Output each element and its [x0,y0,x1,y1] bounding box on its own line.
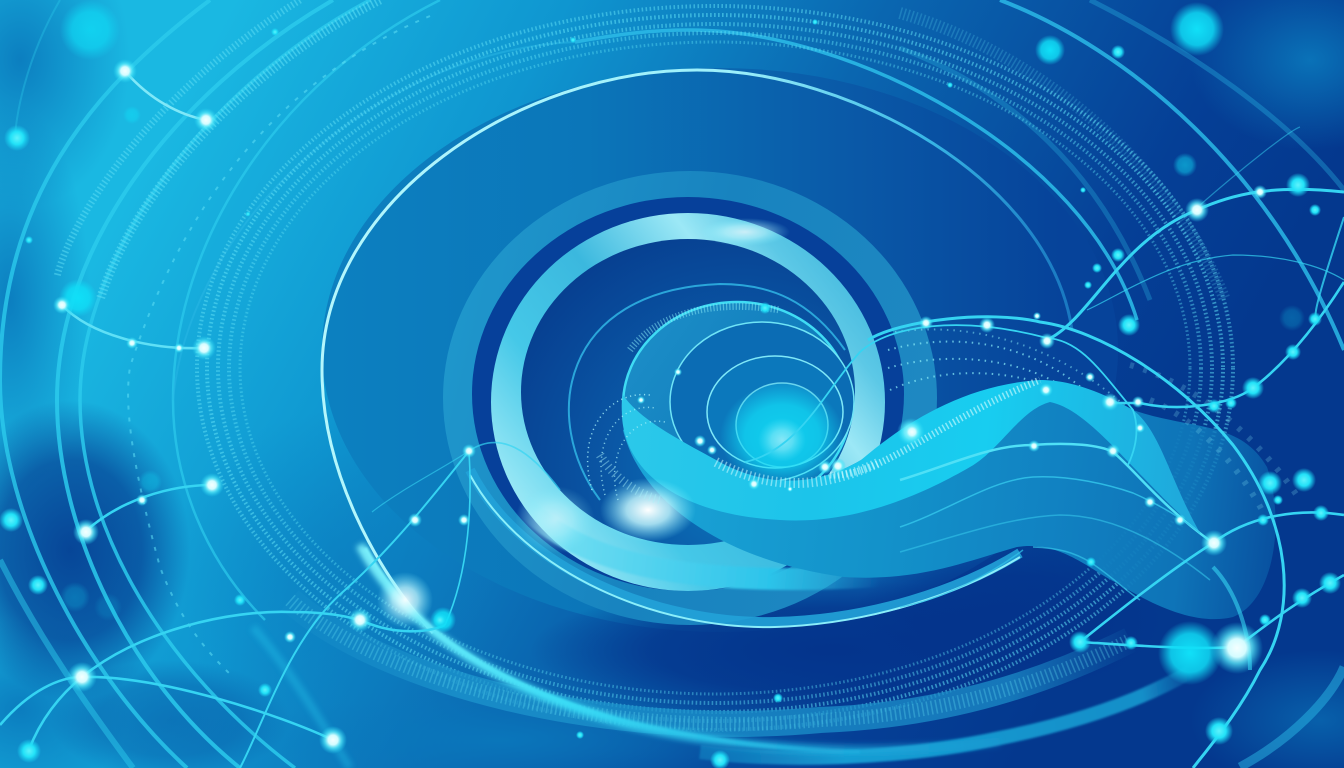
network lines left [0,71,560,768]
middle band ring [443,171,937,625]
flowing ribbon: bright layer [622,380,1213,607]
lower tail of middle band [470,470,1020,627]
ring highlights [515,218,790,554]
dotted particle cloud left of swirl [588,395,665,500]
outer arcs left [0,0,440,768]
inner spiral [569,284,854,508]
dark dotted lobe behind ribbon [888,329,1300,510]
white highlight at ring base [600,478,696,542]
thin white ellipse [322,70,1072,633]
inner field of big ellipse [322,68,1170,720]
inner bright ring [491,213,885,591]
lower glowing sweep [253,545,1190,768]
network lines right [745,127,1344,768]
flowing ribbon: deep layer [623,380,1276,619]
